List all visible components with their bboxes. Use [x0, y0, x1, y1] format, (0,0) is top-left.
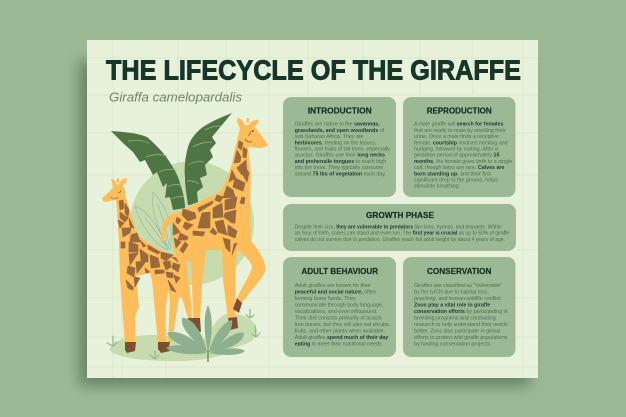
- panel: introduction: INTRODUCTION: [308, 106, 372, 116]
- panel: conservation: research to help understand their needs: [414, 322, 508, 328]
- panel: adult behaviour: tree leaves, but they will also eat shrubs,: [295, 322, 390, 328]
- right palm leaf: [185, 113, 232, 205]
- panel: adult behaviour: vocalizations, and even infrasound.: [295, 309, 377, 315]
- panel: reproduction: female, courtship involves necking and: [414, 140, 508, 146]
- background circle: [130, 161, 254, 285]
- panel: conservation: conservation efforts by participating in: [414, 309, 508, 315]
- panel: introduction: and prehensile tongues to reach high: [295, 159, 386, 165]
- panel: introduction: sub-Saharan Africa. They are: [295, 134, 364, 140]
- panel: introduction: herbivores, feeding on the leaves,: [295, 140, 377, 146]
- panel: growth phase: calves do not survive due to predation. Giraffes reach full adult height by about 4 years of age.: [295, 237, 505, 243]
- panel: reproduction: stimulate breathing.: [414, 184, 460, 190]
- panel: conservation: Giraffes are classified as "Vulnerable": [414, 283, 502, 289]
- card shadow: [79, 60, 530, 386]
- panel: reproduction: significant drop to the ground, helps: [414, 178, 498, 184]
- panel: introduction: flowers, and fruits of tall trees, especially: [295, 146, 390, 152]
- panel: introduction: around 75 lbs of vegetation each day.: [295, 171, 386, 177]
- illustration: giraffes and plants: [102, 113, 268, 362]
- panel: reproduction: A male giraffe will search for females: [414, 122, 503, 128]
- panel: adult behaviour: Adult giraffes spend much of their day: [295, 335, 388, 341]
- panel: adult behaviour: Their diet consists primarily of acacia: [295, 315, 382, 321]
- panel: reproduction: months, the female gives birth to a single: [414, 159, 512, 165]
- panel: conservation: better. Zoos also participate in global: [414, 328, 500, 334]
- panel: adult behaviour: Adult giraffes are known for their: [295, 283, 371, 289]
- panel: reproduction: calf, though twins are rare. Calves are: [414, 165, 504, 171]
- panel: growth phase: GROWTH PHASE: [366, 210, 434, 220]
- panel: adult behaviour: [283, 257, 396, 357]
- big giraffe: [161, 118, 268, 332]
- panel: reproduction: gestation period of approximately 15: [414, 153, 499, 159]
- title: THE LIFECYCLE OF THE GIRAFFE: [106, 54, 521, 86]
- panel: conservation: efforts to protect wild giraffe populations: [414, 335, 508, 341]
- panel: conservation: Zoos play a vital role in giraffe: [414, 302, 490, 308]
- panel: reproduction: REPRODUCTION: [427, 106, 492, 116]
- panel: adult behaviour: peaceful and social nature, often: [295, 289, 376, 295]
- left palm leaf: [111, 131, 185, 210]
- panel: conservation: CONSERVATION: [427, 266, 491, 276]
- panel: reproduction: [403, 97, 516, 197]
- panel: introduction: acacias. Giraffes use their long necks: [295, 153, 385, 159]
- panel: adult behaviour: forming loose herds. They: [295, 296, 356, 302]
- panel: adult behaviour: communicate through body language,: [295, 302, 383, 308]
- panel: growth phase: [283, 204, 516, 251]
- panel: conservation: by the IUCN due to habitat loss,: [414, 289, 489, 295]
- panel: introduction: Giraffes are native to the savannas,: [295, 122, 380, 128]
- pale line leaves: [135, 192, 171, 250]
- grass tufts: [107, 309, 260, 359]
- panel: conservation: [403, 257, 516, 357]
- panel: introduction: grasslands, and open woodlands of: [295, 128, 385, 134]
- panel: introduction: [283, 97, 396, 197]
- panel: reproduction: urine. Once a male finds a receptive: [414, 134, 499, 140]
- panel: adult behaviour: fruits, and other plants when available.: [295, 328, 385, 334]
- panel: adult behaviour: ADULT BEHAVIOUR: [302, 266, 378, 276]
- panel: introduction: into the trees. They typically consume: [295, 165, 383, 171]
- subtitle: scientific name: Giraffa camelopardalis: [109, 90, 243, 104]
- panel: growth phase: Despite their size, they are vulnerable to predators like lions, hyenas, and leopards. Within: [295, 224, 502, 230]
- panel: reproduction: that are ready to mate by smelling their: [414, 128, 506, 134]
- panel: conservation: poaching, and human-wildlife conflict.: [414, 296, 502, 302]
- panel: conservation: by funding conservation projects.: [414, 341, 491, 347]
- ground patches: [110, 313, 257, 361]
- panel: reproduction: born standing up, and their first: [414, 171, 491, 177]
- panel: reproduction: nudging, followed by mating. After a: [414, 146, 498, 152]
- panel: growth phase: an hour of birth, calves can stand and even run. The first year is crucial as up to 50% of giraffe: [295, 231, 509, 237]
- small giraffe: [102, 178, 192, 353]
- bush plant: [166, 305, 245, 362]
- panel: conservation: breeding programs and conducting: [414, 315, 496, 321]
- card background: [87, 40, 538, 378]
- panel: adult behaviour: eating to meet their nutritional needs.: [295, 341, 383, 347]
